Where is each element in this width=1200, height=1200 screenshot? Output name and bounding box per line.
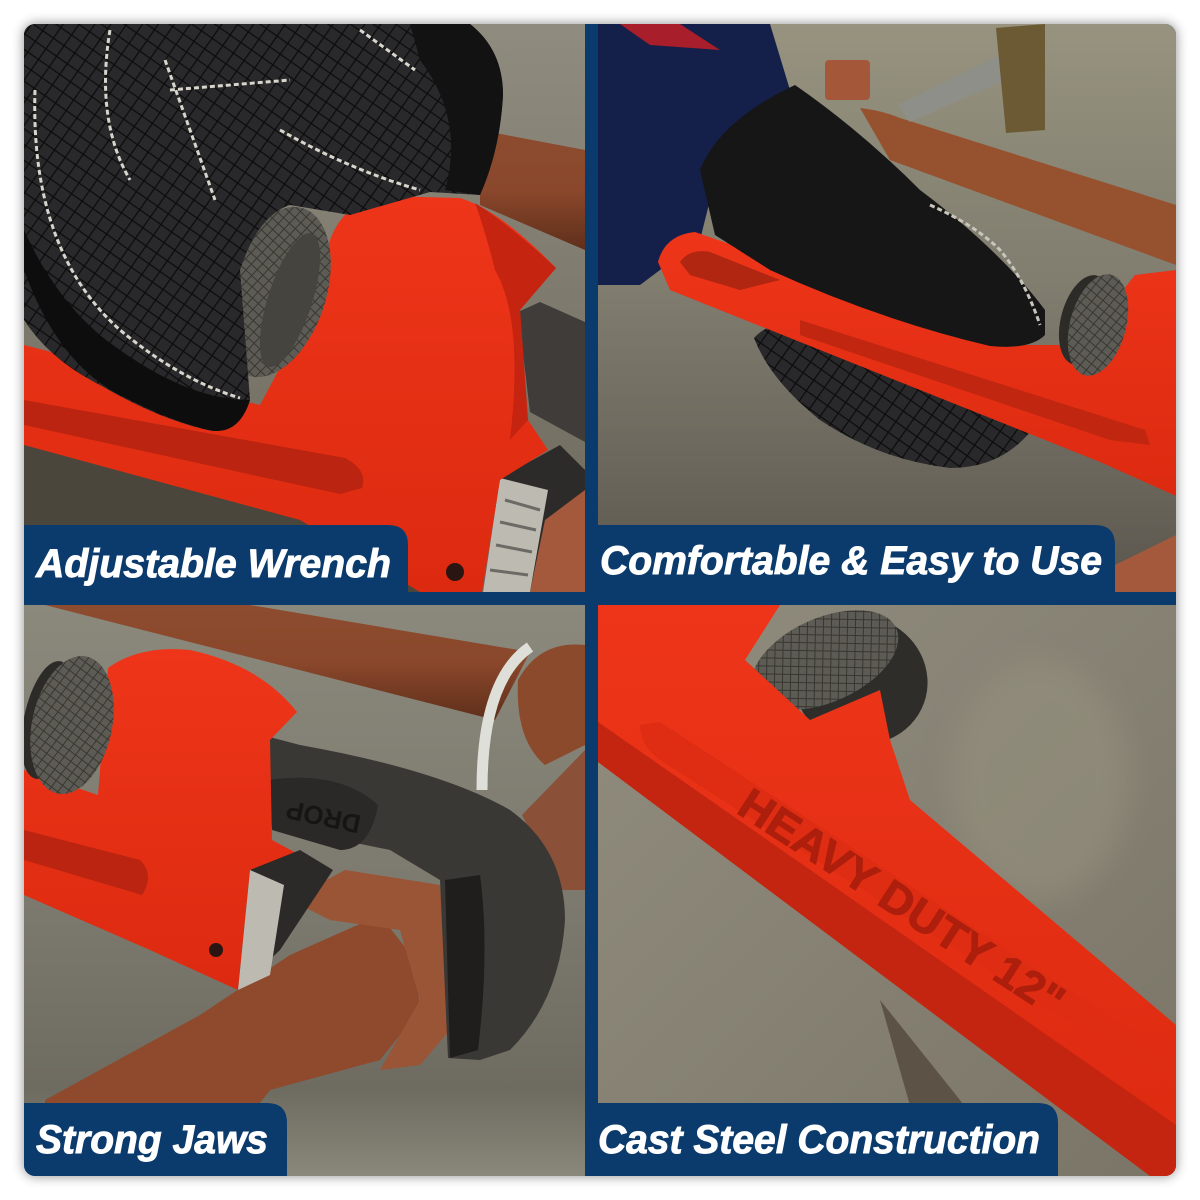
label: adjustable wrench (24, 525, 408, 592)
gloved hand upper (700, 85, 1045, 347)
upper hook jaw (518, 302, 585, 442)
red wrench (598, 605, 1176, 1176)
knurled nut (1058, 274, 1128, 376)
handle slot (24, 400, 363, 494)
rusty pipe corner (1115, 535, 1176, 592)
knurled adjusting nut (240, 206, 331, 377)
top copper pipe (45, 605, 530, 720)
vertical divider (585, 24, 598, 1176)
dark hook jaw (262, 735, 565, 1060)
label: strong jaws: Strong Jaws (36, 1118, 268, 1162)
rusty pipe behind jaw (530, 488, 585, 592)
label: adjustable wrench: Adjustable Wrench (35, 542, 391, 586)
glove (24, 24, 503, 431)
gloved fingers lower (754, 324, 1030, 468)
label: comfortable and easy to use (585, 525, 1115, 592)
copper pipe (860, 108, 1176, 265)
red wrench handle and head (658, 232, 1176, 496)
red wrench head (24, 649, 300, 990)
horizontal divider (24, 592, 1176, 605)
panel: cast steel construction photo (598, 590, 1176, 1176)
jaw stamp: DROP (284, 795, 363, 839)
navy sleeve (598, 24, 790, 285)
label: comfortable and easy to use: Comfortable & Easy to Use (600, 539, 1102, 583)
knurled nut (24, 656, 114, 794)
panel: strong jaws photo (12, 605, 585, 1176)
rusty fitting pipes (45, 750, 585, 1103)
zip tie (482, 647, 530, 790)
red wrench body (24, 196, 556, 592)
label: strong jaws (24, 1103, 287, 1176)
embossed heavy duty text: HEAVY DUTY 12" (730, 779, 1073, 1026)
rivet hole (446, 563, 464, 581)
panel: comfortable and easy to use photo (598, 24, 1176, 592)
panel: adjustable wrench photo (24, 24, 585, 592)
toothed lower jaw (238, 850, 333, 990)
label: cast steel construction (585, 1103, 1058, 1176)
lower toothed jaw (483, 445, 585, 592)
knurled nut (754, 610, 928, 739)
wall bracket and bolt (825, 24, 1045, 133)
label: cast steel construction: Cast Steel Construction (598, 1118, 1040, 1162)
